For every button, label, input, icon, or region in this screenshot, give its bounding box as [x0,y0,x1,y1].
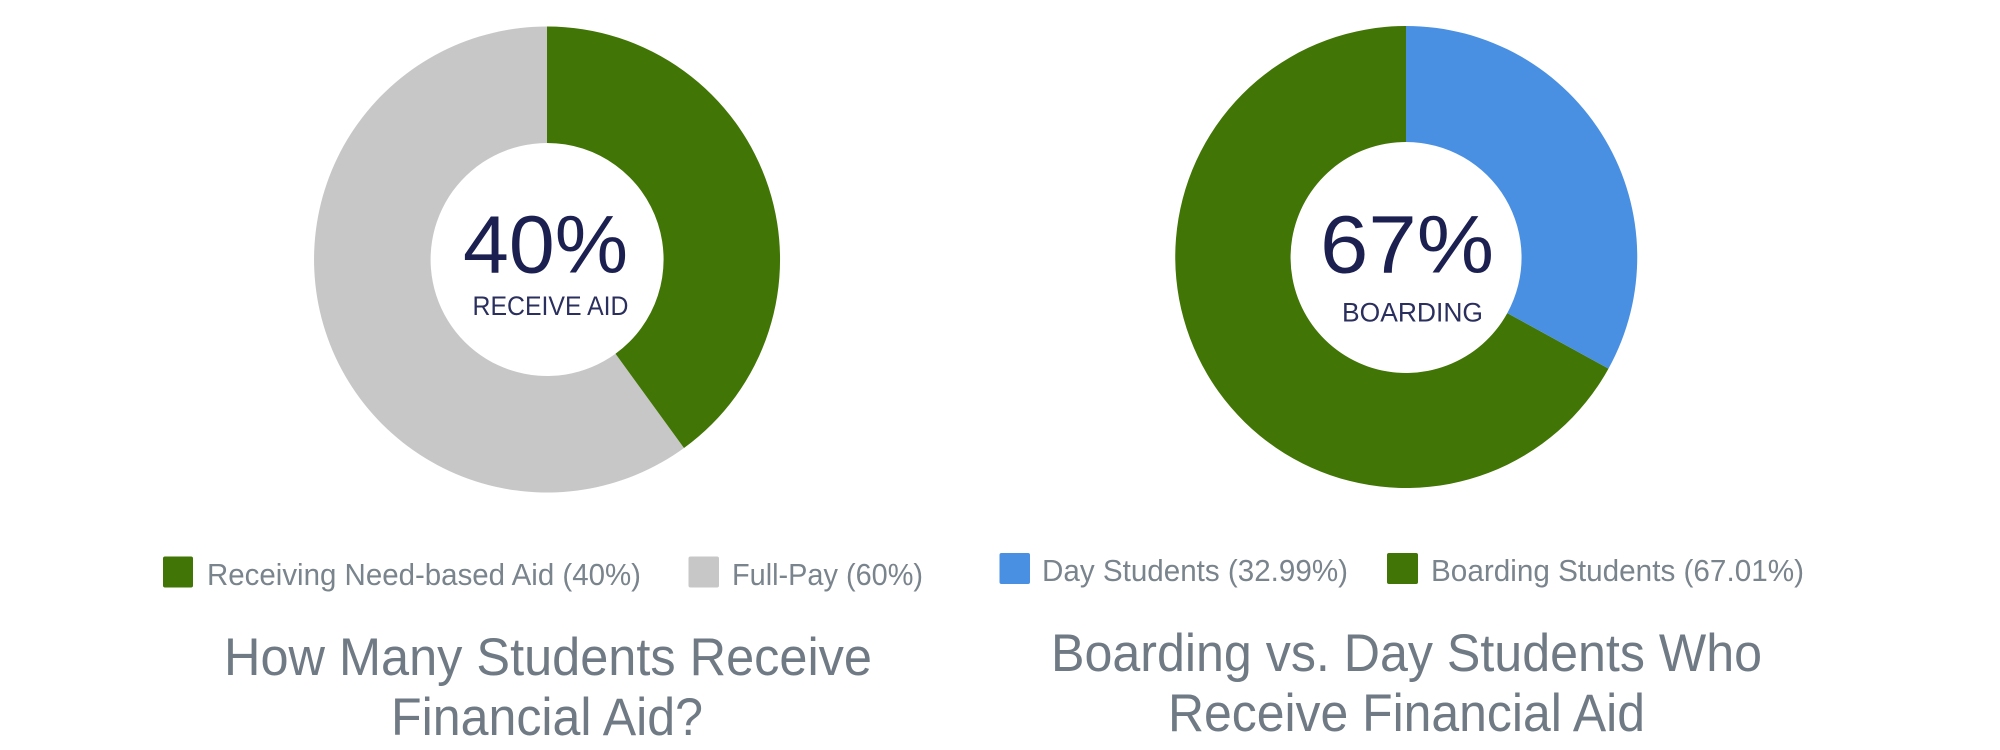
slice: full-pay 60 percent [314,26,684,493]
center label: receive aid: RECEIVE AID [472,291,628,321]
slice: boarding students 67.01 percent [1175,26,1608,488]
panel: how many students receive aid [163,26,923,747]
slice: day students 32.99 percent [1406,26,1637,369]
center value: 40%: 40% [463,200,628,290]
legend: day versus boarding [1000,553,1804,588]
center value: 67%: 67% [1320,200,1494,290]
heading: how many students receive financial aid: Financial Aid? [391,688,703,747]
legend label: day students: Day Students (32.99%) [1042,553,1348,588]
heading: boarding vs. day students who receive financial aid: Receive Financial Aid [1168,684,1645,743]
panel: boarding versus day students [1000,26,1804,743]
donut chart: 40 percent receive aid [314,26,780,493]
legend label: boarding students: Boarding Students (67.01%) [1431,553,1804,588]
legend label: full-pay: Full-Pay (60%) [732,557,923,592]
legend swatch: need-based aid [163,556,193,588]
heading: how many students receive financial aid: How Many Students Receive [224,628,872,687]
slice: receiving need-based aid 40 percent [547,26,780,448]
heading: boarding vs. day students who receive financial aid [1051,624,1762,743]
center label: boarding: BOARDING [1342,298,1483,328]
legend swatch: full-pay [688,556,719,588]
legend swatch: boarding students [1387,553,1418,584]
legend label: need-based aid: Receiving Need-based Aid (40%) [207,557,641,592]
legend swatch: day students [1000,553,1030,584]
heading: how many students receive financial aid [224,628,872,747]
donut chart: 67 percent boarding [1175,26,1637,488]
heading: boarding vs. day students who receive financial aid: Boarding vs. Day Students Who [1051,624,1762,683]
legend: aid versus full-pay [163,556,923,592]
